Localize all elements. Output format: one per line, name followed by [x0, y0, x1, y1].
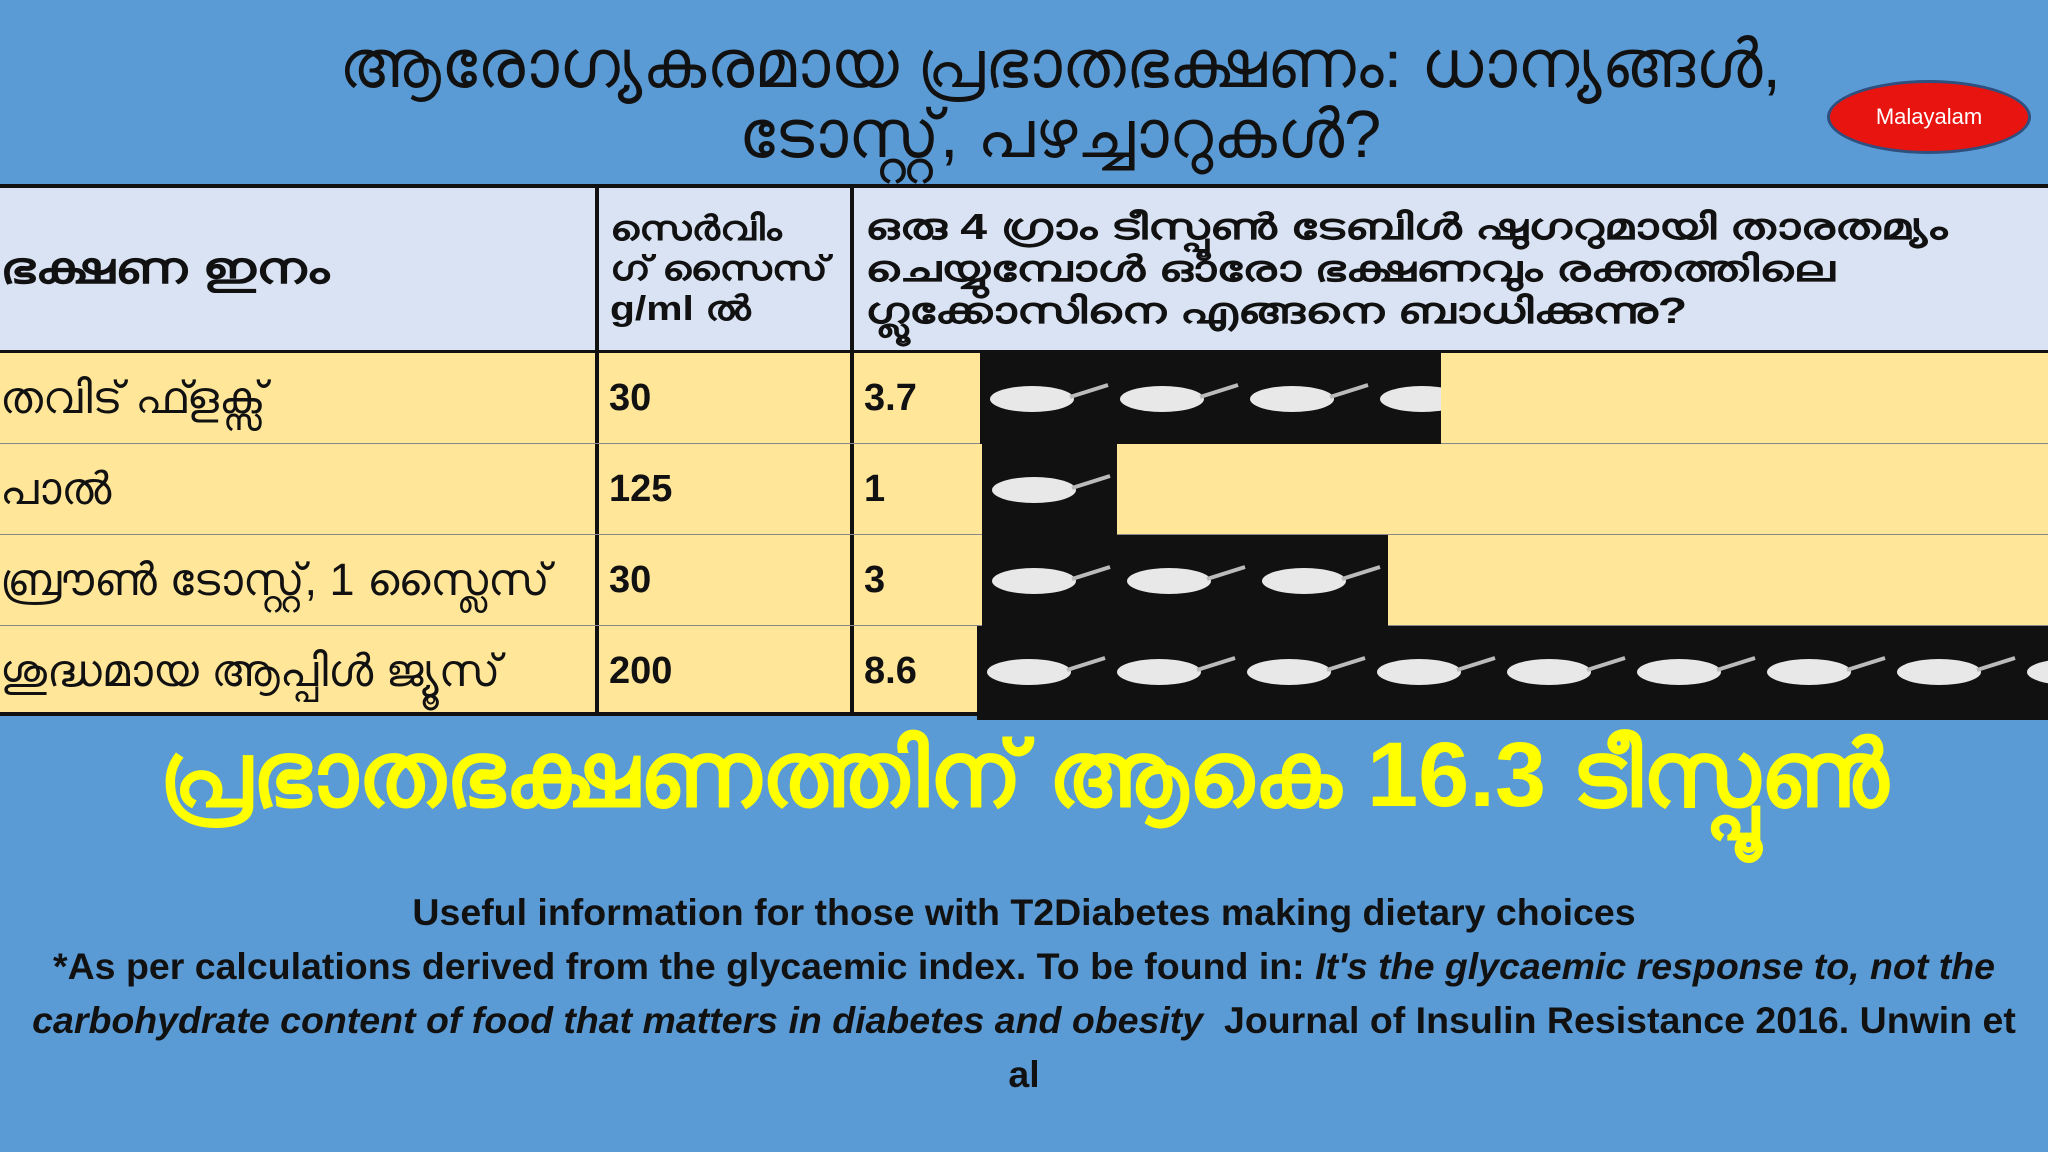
row 1 [0, 353, 1441, 444]
row 2: പാൽ [0, 463, 111, 514]
header: serving size: ഗ് സൈസ് [610, 250, 828, 288]
title: ആരോഗ്യകരമായ പ്രഭാതഭക്ഷണം: ധാന്യങ്ങൾ, [339, 27, 1781, 102]
row 3: 30 [609, 559, 651, 601]
column lines [595, 188, 599, 716]
table [0, 184, 2048, 716]
row 4 [0, 626, 2048, 720]
row 4: 8.6 [864, 650, 917, 692]
row 2 [0, 444, 1117, 535]
row 3 [0, 535, 1388, 626]
header: serving size [610, 210, 833, 328]
header row [0, 188, 2048, 353]
header: food item: ഭക്ഷണ ഇനം [0, 244, 329, 293]
footer notes: carbohydrate content of food that matters in diabetes and obesity Journal of Insulin Resistance 2016. Unwin et [32, 999, 2016, 1041]
spoons row 3 [982, 535, 1388, 626]
title: ടോസ്റ്റ്, പഴച്ചാറുകൾ? [739, 97, 1381, 172]
footer notes [32, 891, 2016, 1095]
language badge [1827, 80, 2031, 154]
row 1: 3.7 [864, 377, 917, 419]
header: comparison [865, 206, 1948, 347]
title [339, 27, 1781, 184]
header: comparison: ചെയ്യുമ്പോൾ ഓരോ ഭക്ഷണവും രക്തത്തിലെ [865, 248, 1835, 289]
row 1: 30 [609, 377, 651, 419]
header: comparison: ഒരു 4 ഗ്രാം ടീസ്പൂൺ ടേബിൾ ഷുഗറുമായി താരതമ്യം [865, 206, 1948, 247]
total headline: പ്രഭാതഭക്ഷണത്തിന് ആകെ 16.3 ടീസ്പൂൺ [159, 724, 1889, 826]
row 4: 200 [609, 650, 672, 692]
header: serving size: g/ml ൽ [610, 290, 751, 328]
header: comparison: ഗ്ലൂക്കോസിനെ എങ്ങനെ ബാധിക്കുന്നു? [865, 290, 1687, 331]
row 2: 1 [864, 468, 885, 510]
row 3: 3 [864, 559, 885, 601]
row 2: 125 [609, 468, 672, 510]
spoons row 2 [982, 444, 1117, 535]
header: serving size: സെർവിം [610, 210, 782, 248]
language badge: Malayalam [1876, 104, 1982, 129]
spoons row 1 [980, 353, 1441, 444]
row 4: ശുദ്ധമായ ആപ്പിൾ ജ്യൂസ് [0, 644, 500, 696]
row 3: ബ്രൗൺ ടോസ്റ്റ്, 1 സ്ലൈസ് [0, 554, 550, 605]
footer notes: *As per calculations derived from the glycaemic index. To be found in: It's the glycaemic response to, not the [53, 945, 1995, 987]
row 1: തവിട് ഫ്ളക്സ് [0, 372, 266, 423]
spoons row 4 [977, 626, 2048, 720]
footer notes: al [1008, 1053, 1040, 1095]
footer notes: Useful information for those with T2Diabetes making dietary choices [412, 891, 1636, 933]
